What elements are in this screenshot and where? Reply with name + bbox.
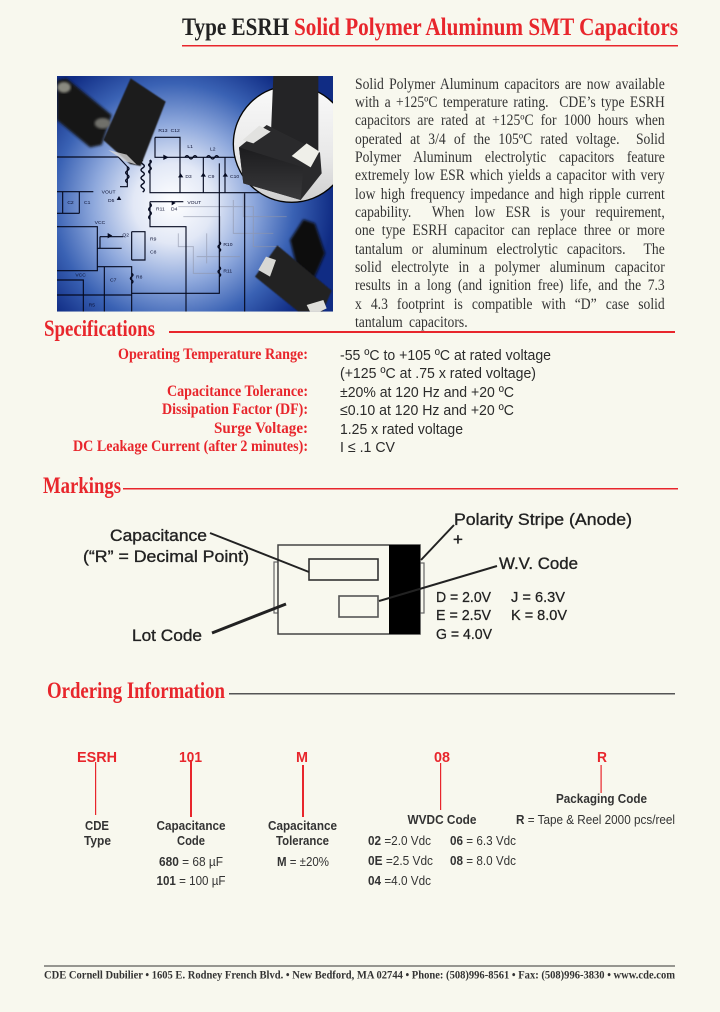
schematic labels: R11 (223, 269, 232, 275)
intro paragraph: tantalum or aluminum electrolytic capacitors. The (355, 241, 665, 258)
ordering column: packaging code: R = Tape & Reel 2000 pcs/reel (516, 812, 675, 827)
ordering column: capacitance tolerance: M (296, 750, 308, 766)
specification labels: Operating Temperature Range: (118, 346, 308, 363)
ordering column: CDE type: ESRH (77, 750, 117, 766)
schematic labels: R9 (150, 237, 157, 243)
capacitor in circle (270, 76, 318, 157)
schematic labels: C9 (208, 174, 215, 180)
ordering column: capacitance tolerance: Tolerance (276, 833, 329, 848)
coils (126, 156, 221, 283)
intro paragraph: tantalum capacitors. (355, 314, 468, 331)
voltage code list: D = 2.0V (436, 590, 491, 606)
diagram labels: Capacitance (110, 526, 207, 545)
specification values: I ≤ .1 CV (340, 439, 395, 456)
magnifier circle (232, 88, 333, 203)
schematic labels: C7 (110, 277, 117, 283)
specification labels (73, 346, 308, 455)
schematic labels: D3 (185, 174, 192, 180)
intro paragraph: capacitors are rated at +125ºC for 1000 hours when (355, 112, 665, 129)
specification values: -55 ºC to +105 ºC at rated voltage (340, 347, 551, 364)
voltage code list: G = 4.0V (436, 627, 492, 643)
ordering column: capacitance code: 101 = 100 µF (156, 873, 226, 888)
specification values (340, 347, 551, 456)
intro paragraph: extremely low ESR which yields a capacitor with very (355, 167, 665, 184)
ordering column: capacitance code: Capacitance (156, 818, 226, 833)
ordering column: WVDC code: 0E =2.5 Vdc (368, 853, 433, 868)
ordering column: WVDC code: 08 = 8.0 Vdc (450, 853, 516, 868)
heading: specifications: Specifications (44, 316, 155, 341)
specification labels: Surge Voltage: (214, 420, 308, 437)
diodes (108, 155, 228, 238)
polarity stripe (389, 545, 420, 634)
capacitance box (309, 559, 378, 580)
schematic labels: Q2 (122, 233, 129, 239)
schematic labels: L1 (187, 144, 193, 150)
terminal tabs (274, 562, 424, 613)
ordering column: capacitance code: 680 = 68 µF (159, 854, 223, 869)
ghost circuit (178, 193, 287, 273)
schematic labels: L2 (210, 147, 216, 153)
ordering column: WVDC code (368, 750, 516, 888)
schematic labels: C12 (171, 128, 180, 134)
intro paragraph: capability. When low ESR is your requirement, (355, 204, 665, 221)
capacitor top-left blurred (57, 78, 112, 147)
schematic labels: R5 (89, 303, 95, 309)
intro paragraph: with a +125ºC temperature rating. CDE’s type ESRH (355, 94, 665, 111)
schematic labels: C2 (67, 200, 74, 206)
schematic labels: R8 (136, 274, 143, 280)
schematic labels: C1 (84, 200, 91, 206)
ordering column: WVDC code: 04 =4.0 Vdc (368, 873, 431, 888)
intro paragraph: results in a long (and ignition free) life, and the 7.3 (355, 277, 665, 294)
intro paragraph: Polymer Aluminum electrolytic capacitors feature (355, 149, 665, 166)
footer contact line: CDE Cornell Dubilier • 1605 E. Rodney French Blvd. • New Bedford, MA 02744 • Phone: (508)996-8561 • Fax: (508)996-3830 • www.cde.com (44, 970, 675, 982)
intro paragraph: operated at 3/4 of the 105ºC rated voltage. Solid (355, 131, 665, 148)
capacitor bottom-right rear blurred (290, 219, 325, 280)
specification values: ≤0.10 at 120 Hz and +20 ºC (340, 402, 514, 419)
ordering column: capacitance tolerance: M = ±20% (277, 854, 329, 869)
ordering column: capacitance tolerance (268, 750, 337, 869)
ordering column: capacitance code: 101 (179, 750, 202, 766)
capacitor marking diagram (83, 510, 632, 645)
diagram labels: W.V. Code (499, 554, 578, 573)
specification labels: Dissipation Factor (DF): (162, 401, 308, 418)
ordering column: WVDC code: 08 (434, 750, 450, 766)
photo: capacitors over circuit schematic (57, 76, 350, 312)
ordering column: packaging code: R (597, 750, 607, 766)
schematic labels: R13 (158, 128, 168, 134)
intro paragraph: solid electrolyte in a polymer aluminum capacitor (355, 259, 665, 276)
voltage code list: E = 2.5V (436, 608, 491, 624)
schematic labels: VOUT (102, 189, 116, 195)
heading: markings: Markings (43, 473, 121, 498)
schematic labels: VOUT (187, 200, 201, 206)
ordering column: CDE type: Type (84, 833, 111, 848)
schematic labels: C8 (150, 249, 157, 255)
intro paragraph (355, 76, 665, 331)
specification values: 1.25 x rated voltage (340, 421, 463, 438)
schematic labels: D5 (108, 198, 115, 204)
intro paragraph: x 4.3 footprint is compatible with “D” case solid (355, 296, 665, 313)
specification labels: DC Leakage Current (after 2 minutes): (73, 438, 308, 455)
voltage code list (436, 590, 567, 643)
diagram labels: + (453, 530, 463, 549)
voltage code box (339, 596, 378, 617)
schematic labels: VCC (95, 220, 106, 226)
voltage code list: K = 8.0V (511, 608, 567, 624)
title: Type ESRH (182, 14, 289, 41)
intro paragraph: Solid Polymer Aluminum capacitors are now available (355, 76, 665, 93)
ordering column: CDE type (77, 750, 117, 848)
ordering column: WVDC code: WVDC Code (408, 812, 476, 827)
diagram labels: Polarity Stripe (Anode) (454, 510, 632, 529)
schematic labels: R10 (223, 242, 233, 248)
schematic labels: R11 (156, 207, 165, 213)
diagram labels (83, 510, 632, 645)
ordering column: packaging code (516, 750, 675, 827)
title (182, 14, 678, 46)
capacitor body (278, 545, 420, 634)
specification values: ±20% at 120 Hz and +20 ºC (340, 384, 514, 401)
specification values: (+125 ºC at .75 x rated voltage) (340, 365, 536, 382)
ordering column: capacitance code (156, 750, 226, 888)
ordering column: WVDC code: 06 = 6.3 Vdc (450, 833, 516, 848)
schematic labels (67, 128, 239, 309)
diagram labels: Lot Code (132, 626, 202, 645)
ordering column: capacitance code: Code (177, 833, 205, 848)
capacitor bottom right (255, 245, 332, 312)
ordering column: packaging code: Packaging Code (556, 791, 647, 806)
intro paragraph: low high frequency impedance and high ripple current (355, 186, 665, 203)
heading: ordering information: Ordering Information (47, 678, 225, 703)
specification labels: Capacitance Tolerance: (167, 383, 308, 400)
ordering column: CDE type: CDE (85, 818, 109, 833)
schematic labels: VCC (75, 273, 86, 279)
intro paragraph: one type ESRH capacitor can replace three or more (355, 222, 665, 239)
diagram labels: (“R” = Decimal Point) (83, 547, 249, 566)
ordering column: capacitance tolerance: Capacitance (268, 818, 337, 833)
leader lines (210, 525, 497, 633)
voltage code list: J = 6.3V (511, 590, 565, 606)
schematic lines (57, 137, 267, 312)
schematic labels: D4 (171, 207, 178, 213)
schematic labels: C10 (230, 174, 239, 180)
ordering column: WVDC code: 02 =2.0 Vdc (368, 833, 431, 848)
capacitor top centre (103, 78, 166, 166)
